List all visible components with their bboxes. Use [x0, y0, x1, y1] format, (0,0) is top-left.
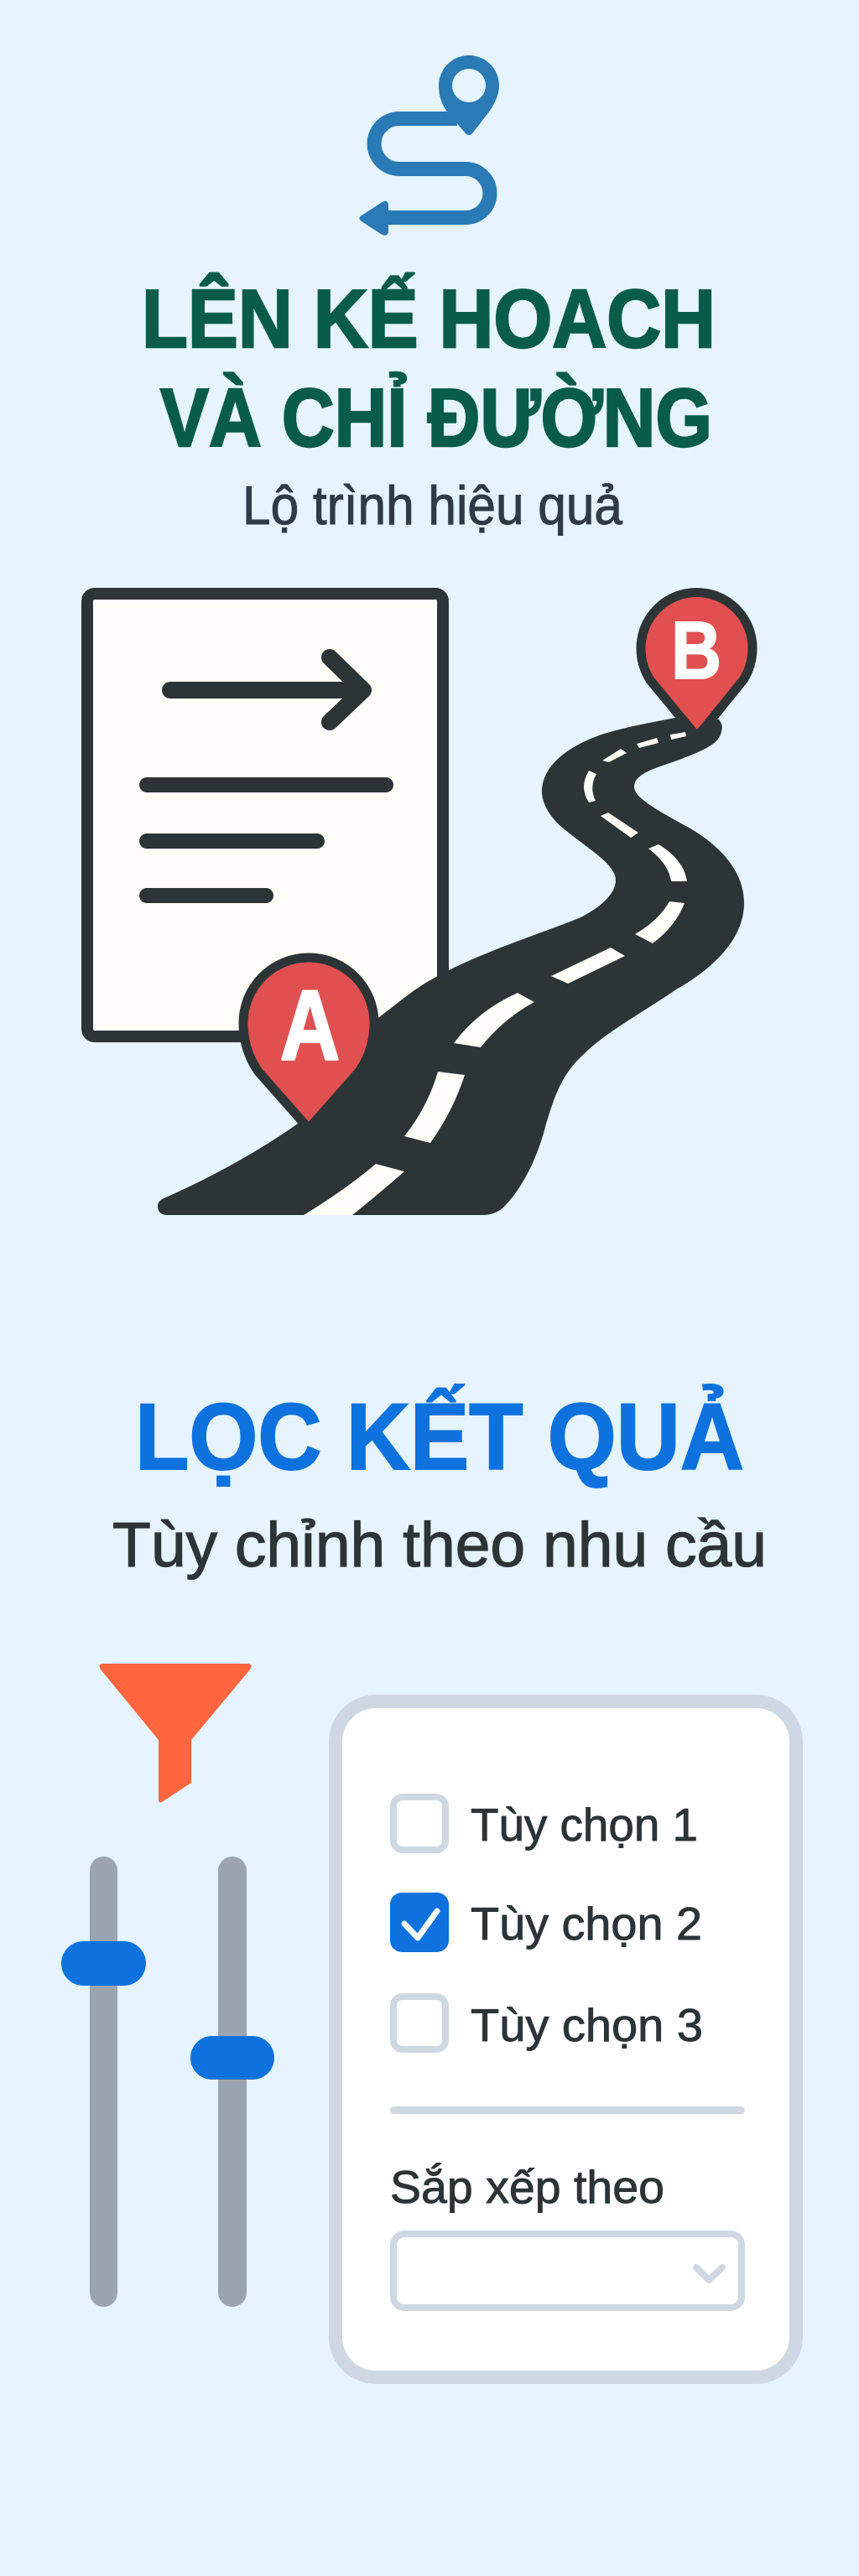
icon: funnel	[100, 1664, 251, 1803]
option 3: Tùy chọn 3	[471, 1999, 703, 2051]
option 2, checked: Tùy chọn 2	[471, 1898, 702, 1950]
title: LÊN KẾ HOACH	[142, 273, 716, 365]
sort label: Sắp xếp theo	[390, 2161, 664, 2213]
option 2, checked	[390, 1893, 702, 1952]
pin B: B	[671, 605, 721, 696]
pin A	[243, 958, 374, 1129]
subheading: customise: Tùy chỉnh theo nhu cầu	[112, 1509, 767, 1580]
slider one	[61, 1857, 146, 2307]
panel: filter options	[336, 1701, 796, 2377]
slider two	[190, 1857, 274, 2307]
pin B	[641, 593, 752, 737]
text lines on document	[147, 785, 386, 896]
dropdown	[393, 2234, 742, 2308]
icon: route with location pin	[359, 55, 499, 236]
illustration: winding road	[158, 718, 744, 1215]
option 1: Tùy chọn 1	[471, 1799, 698, 1851]
title: VÀ CHỈ ĐƯỜNG	[160, 371, 712, 464]
heading: filter results: LỌC KẾT QUẢ	[135, 1384, 744, 1489]
arrow on document	[170, 657, 363, 722]
illustration: document with directions	[87, 594, 443, 1036]
road centre dashes	[304, 732, 687, 1215]
subtitle: Lộ trình hiệu quả	[242, 475, 623, 536]
pin A: A	[280, 970, 340, 1081]
title	[142, 273, 716, 464]
